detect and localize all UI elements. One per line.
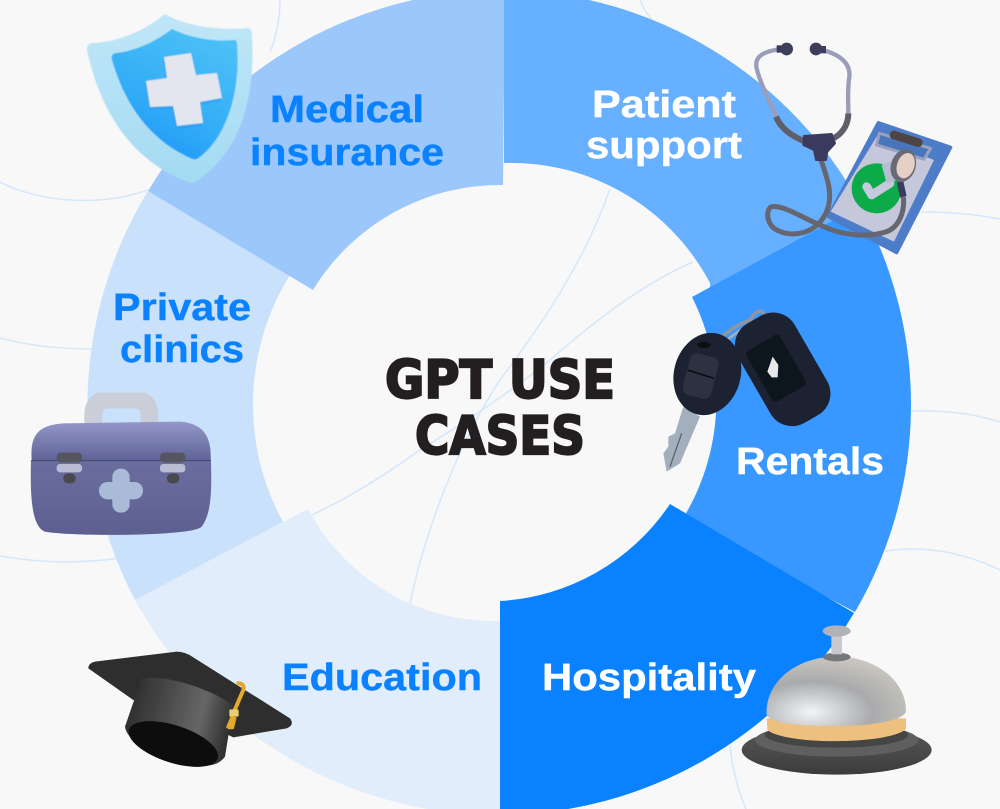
icon: hotel service bell xyxy=(742,625,932,775)
label: private clinics: clinics xyxy=(120,329,244,371)
segment: hospitality xyxy=(500,504,854,809)
label: medical insurance: Medical xyxy=(270,89,424,131)
label: patient support: Patient xyxy=(592,84,736,126)
title xyxy=(385,350,615,467)
icon: medical shield xyxy=(87,14,252,183)
icon: medical toolbox xyxy=(31,399,211,535)
icon: graduation cap xyxy=(88,652,292,776)
label: medical insurance: insurance xyxy=(250,132,444,174)
label: rentals: Rentals xyxy=(736,441,884,483)
label: patient support: support xyxy=(586,125,742,167)
icon: stethoscope and clipboard xyxy=(756,43,951,253)
label: private clinics xyxy=(113,287,251,371)
label: private clinics: Private xyxy=(113,287,251,329)
title: GPT USE xyxy=(385,350,615,411)
segment: medical insurance xyxy=(148,0,505,290)
segment: patient support xyxy=(504,0,862,300)
label: patient support xyxy=(586,84,742,167)
segment: private clinics xyxy=(87,191,290,600)
icon: car keys xyxy=(663,303,840,472)
label: medical insurance xyxy=(250,89,444,174)
label: hospitality: Hospitality xyxy=(542,657,756,699)
segment: rentals xyxy=(682,206,911,612)
segment: education xyxy=(135,509,500,809)
title: CASES xyxy=(415,406,585,467)
label: education: Education xyxy=(282,657,482,699)
